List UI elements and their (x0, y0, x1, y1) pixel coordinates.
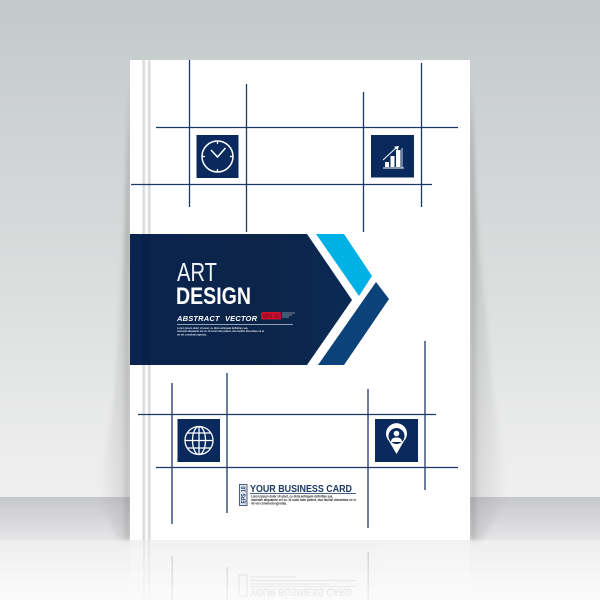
badge: EPS 10 (261, 312, 295, 320)
icon: clock (196, 135, 238, 178)
banner body text (177, 326, 264, 336)
banner body text: mi vel commodo ignotas. (177, 332, 207, 336)
body text: molestie aliquando vel cu. Id sumi tuim putent, duo facilisi dissentias ne ei (251, 498, 356, 502)
body text (251, 494, 356, 506)
subtitle: ABSTRACT VECTOR (176, 314, 258, 323)
bottom grid lines (138, 341, 458, 528)
top grid lines (131, 60, 458, 232)
heading: your business card: YOUR BUSINESS CARD (250, 483, 352, 495)
brochure page (130, 60, 470, 540)
heading: ART: ART (177, 259, 217, 287)
banner spine shading (142, 234, 150, 365)
body text: Lorem ipsum dolor sit amet, cu dicta antiopam definitiao sea, (251, 494, 333, 498)
chevron: cyan (316, 234, 372, 296)
banner body text: molestie aliquando vel cu. Id sumi tuim putent, duo facilisi dissentias ne ei (177, 329, 264, 333)
brochure reflection: YOUR BUSINESS CARD (250, 586, 352, 598)
right cast shadow (470, 80, 508, 540)
banner rule (177, 323, 293, 326)
heading: DESIGN: DESIGN (176, 283, 251, 310)
icon: growth chart (371, 135, 414, 178)
icon: map pin with person (375, 419, 418, 462)
banner body text: Lorem ipsum dolor sit amet, cu dicta antiopam definitiao sea, (177, 326, 248, 330)
floor band (0, 497, 600, 540)
brochure reflection (130, 540, 470, 600)
badge: EPS 10: EPS 10 (263, 314, 279, 320)
body text: mi vel commodo ignotas. (251, 502, 287, 506)
banner arrow (130, 234, 352, 365)
spine fold lines (142, 60, 150, 540)
glossy ground (0, 540, 600, 600)
reflection fade (130, 540, 470, 600)
left cast shadow (98, 80, 130, 540)
business card block (240, 483, 356, 506)
icon: globe (178, 419, 220, 462)
badge: EPS vertical: EPS 10 (242, 486, 248, 504)
chevron: blue (318, 282, 389, 365)
rule (250, 492, 356, 495)
